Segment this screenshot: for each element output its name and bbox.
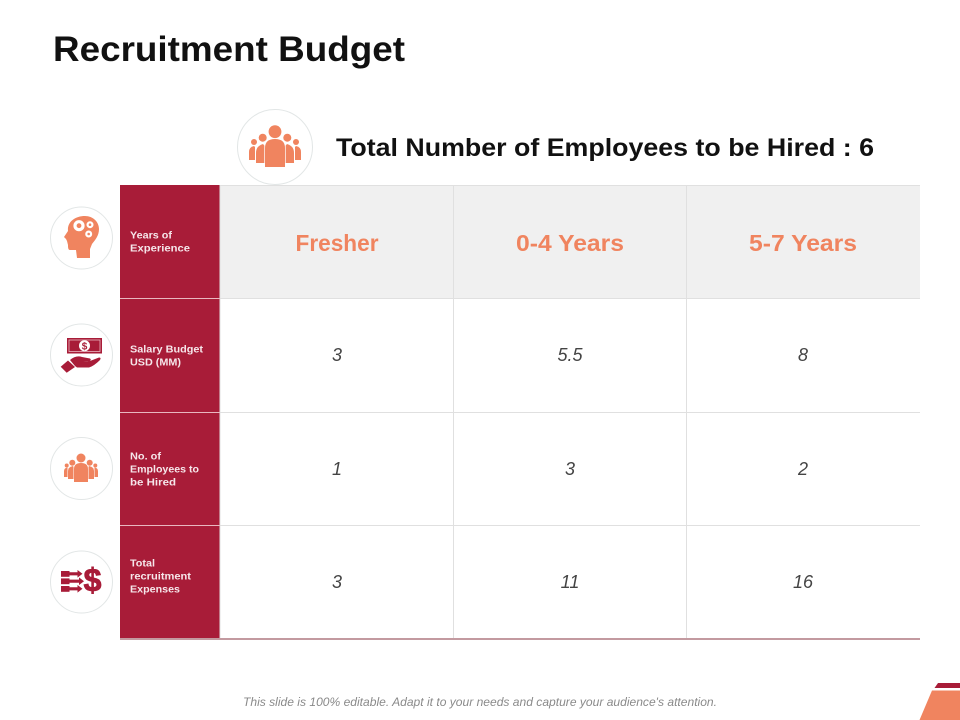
salary values: 5.5 [557, 345, 583, 365]
column header: Fresher: Fresher [296, 230, 379, 256]
employees values: 3 [565, 459, 575, 479]
row label: years of experience: Experience [130, 242, 190, 254]
salary values: 3 [332, 345, 342, 365]
row label: employees hired: Employees to [130, 464, 199, 476]
icon: expenses dollar with arrows: $ [84, 562, 102, 598]
icon: hand holding money: $ [82, 341, 88, 352]
expenses values: 16 [793, 572, 814, 592]
row label: total expenses: Expenses [130, 584, 180, 596]
icon: expenses dollar with arrows [50, 551, 112, 613]
title: Recruitment Budget [53, 30, 405, 69]
salary values: 8 [798, 345, 808, 365]
employees values: 2 [797, 459, 808, 479]
salary values [332, 345, 808, 365]
table [120, 185, 920, 639]
heading: total employees: Total Number of Employees to be Hired : 6 [336, 134, 874, 162]
row label: employees hired: No. of [130, 450, 162, 462]
corner decoration [920, 683, 960, 720]
employees values [332, 459, 808, 479]
expenses values: 3 [332, 572, 342, 592]
row label: employees hired [130, 450, 199, 488]
column header: 5-7 Years: 5-7 Years [749, 230, 857, 256]
icon: head with gears [50, 207, 112, 269]
row label: total expenses: Total [130, 558, 155, 570]
row label: total expenses: recruitment [130, 570, 192, 582]
header row background [220, 185, 920, 298]
row label: total expenses [130, 558, 192, 596]
expenses values [332, 572, 814, 592]
icon: employees group in circle [238, 110, 312, 184]
footer note: This slide is 100% editable. Adapt it to your needs and capture your audience's attention. [243, 695, 717, 709]
row label: salary budget: Salary Budget [130, 344, 204, 356]
row label: salary budget: USD (MM) [130, 356, 181, 368]
expenses values: 11 [561, 572, 579, 592]
column header: 0-4 Years: 0-4 Years [516, 230, 624, 256]
row label: salary budget [130, 344, 204, 368]
row label: employees hired: be Hired [130, 476, 176, 488]
first column red panel [120, 185, 220, 639]
icon: hand holding money [50, 324, 112, 386]
row label: years of experience [130, 230, 190, 254]
employees values: 1 [332, 459, 342, 479]
icon: employees small [50, 438, 112, 500]
row label: years of experience: Years of [130, 230, 173, 242]
